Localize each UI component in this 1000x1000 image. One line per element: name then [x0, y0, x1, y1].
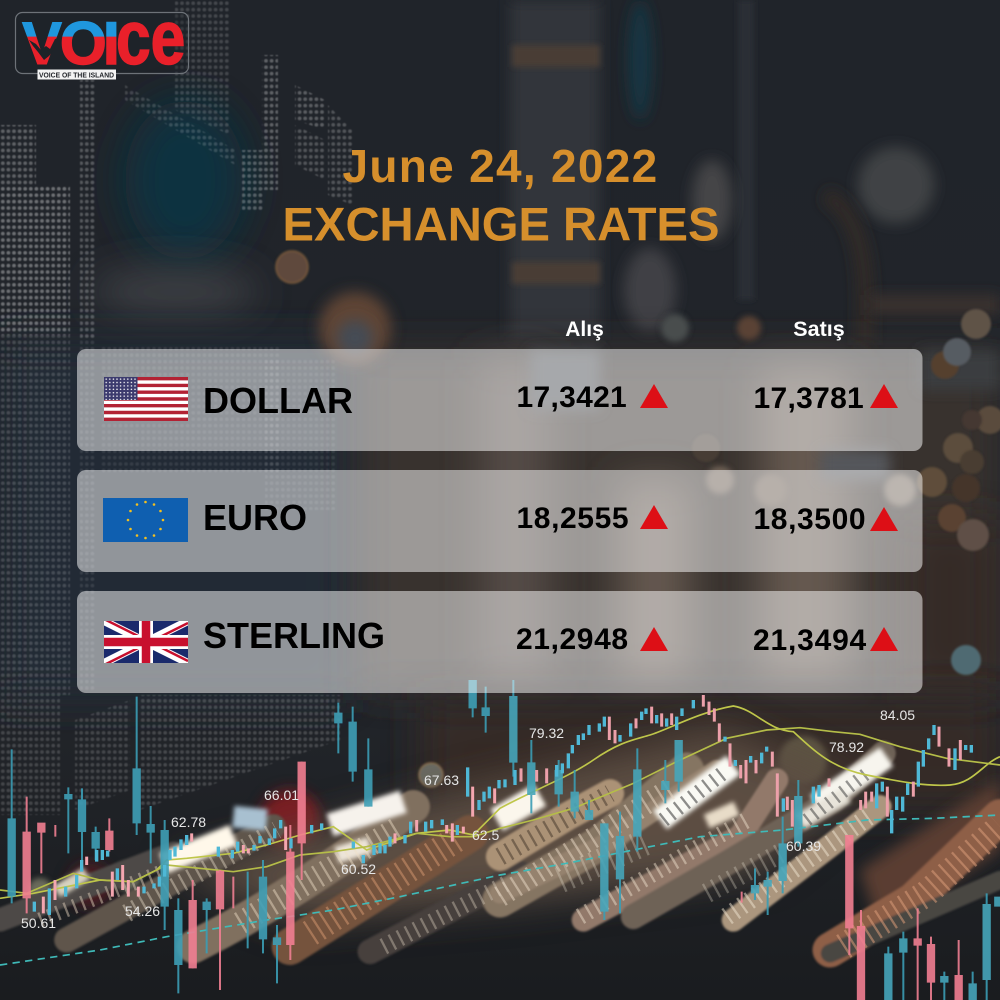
title [283, 140, 719, 252]
chart value labels: 79.32 [529, 725, 564, 741]
coin reeding [40, 770, 1000, 947]
column header: Satış: Satış [793, 317, 845, 341]
logo letters O I: O [60, 10, 107, 77]
coins photo [0, 730, 1000, 953]
panel: euro row [77, 470, 922, 572]
column header: Alış: Alış [565, 318, 604, 341]
icon: US flag [104, 377, 188, 421]
chart value labels: 50.61 [21, 915, 56, 931]
buying rate: dollar: 17,3421 [516, 381, 627, 414]
icon: up arrow [870, 627, 898, 651]
chart value labels [21, 707, 915, 931]
logo tagline: VOICE OF THE ISLAND [39, 70, 114, 79]
chart value labels: 60.39 [786, 838, 821, 854]
chart value labels: 84.05 [880, 707, 915, 723]
chart value labels: 62.78 [171, 814, 206, 830]
chart overlay: large candlesticks [12, 680, 998, 1000]
logo: Voice of the Island [16, 0, 188, 80]
icon: up arrow [640, 384, 668, 408]
icon: up arrow [870, 507, 898, 531]
logo letter V: V [22, 10, 62, 77]
currency name: euro: EURO [203, 497, 307, 538]
currency name: sterling: STERLING [203, 615, 385, 656]
logo letters O I: I [103, 10, 120, 77]
chart value labels: 60.52 [341, 861, 376, 877]
icon: UK flag [104, 621, 188, 663]
icon: up arrow [870, 384, 898, 408]
currency name: dollar: DOLLAR [203, 380, 353, 421]
buying rate: euro: 18,2555 [516, 502, 629, 535]
dot matrix panels [0, 0, 352, 815]
buying rate: sterling: 21,2948 [516, 623, 629, 656]
selling rate: sterling: 21,3494 [753, 624, 867, 657]
logo tear detail [29, 38, 58, 60]
selling rate: euro: 18,3500 [754, 503, 866, 536]
icon: EU flag [103, 498, 188, 542]
icon: up arrow [640, 627, 668, 651]
chart value labels: 66.01 [264, 787, 299, 803]
chart value labels: 78.92 [829, 739, 864, 755]
panel: dollar row [77, 349, 922, 451]
title heading: EXCHANGE RATES [283, 198, 719, 252]
title date: June 24, 2022 [342, 140, 659, 192]
chart value labels: 67.63 [424, 772, 459, 788]
chart value labels: 62.5 [472, 827, 499, 843]
teal glow [125, 100, 245, 260]
bokeh lights [28, 251, 1000, 907]
coin highlights [57, 757, 887, 892]
selling rate: dollar: 17,3781 [754, 382, 864, 415]
chart overlay: small candlesticks [34, 695, 971, 915]
icon: up arrow [640, 505, 668, 529]
panel: sterling row [77, 591, 922, 693]
chart overlay: moving average lines [0, 706, 1000, 965]
chart value labels: 54.26 [125, 903, 160, 919]
